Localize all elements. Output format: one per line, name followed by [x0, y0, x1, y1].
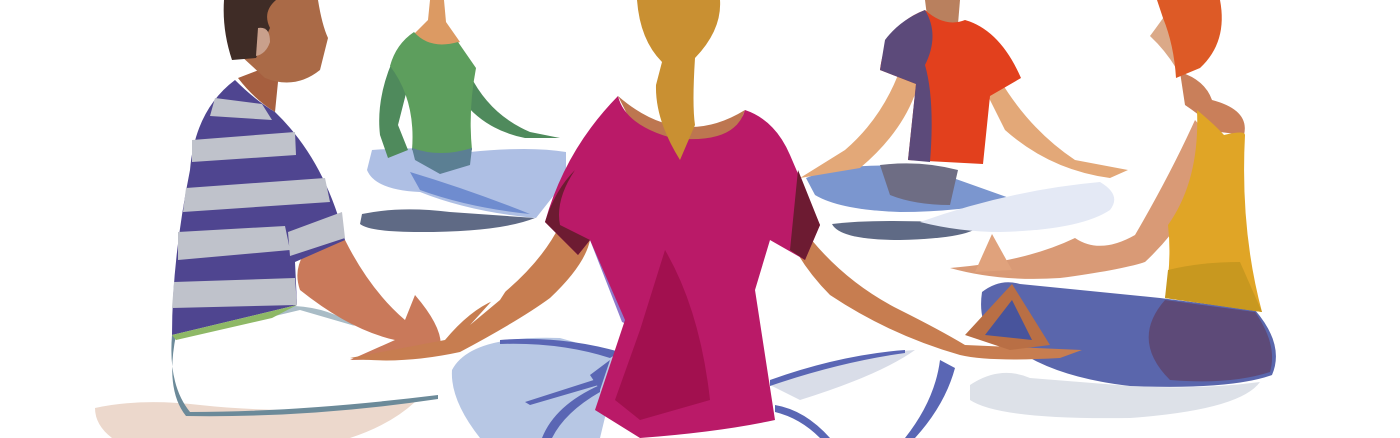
magenta shirt: [545, 96, 820, 438]
legs: [806, 166, 1015, 212]
arms: [800, 75, 918, 178]
yellow top: [1165, 110, 1262, 312]
hands and arm: [950, 120, 1222, 279]
head: [240, 0, 328, 82]
neck: [238, 62, 280, 112]
figure: central woman in magenta shirt seen from behind: [350, 0, 1082, 438]
arms: [379, 62, 412, 158]
floor shadow: [970, 373, 1260, 418]
right arm: [790, 225, 1082, 359]
floor shadow: [95, 402, 415, 438]
neck and shoulder: [1180, 72, 1245, 135]
ear: [256, 28, 270, 56]
hem: [172, 305, 297, 340]
striped shirt: [172, 80, 345, 335]
leg outline: [171, 335, 438, 416]
red shirt: [880, 10, 1021, 164]
figure: back left person in green top: [360, 0, 566, 232]
legs: [367, 148, 566, 218]
neck: [414, 0, 460, 50]
right hand: [965, 284, 1050, 350]
floor shadow: [360, 209, 535, 232]
green top: [390, 32, 476, 155]
red hair: [1157, 0, 1222, 78]
figure: right person in yellow top: [950, 0, 1276, 418]
lavender shade under sleeve: [590, 215, 640, 330]
jeans: [981, 282, 1276, 387]
arm: [297, 238, 441, 360]
blonde hair and ponytail: [637, 0, 720, 160]
face: [1150, 14, 1190, 72]
shirt stripes: [172, 98, 345, 308]
left arm: [350, 225, 590, 360]
shirt shadow: [880, 10, 932, 162]
crossed legs: [452, 338, 620, 438]
waist shading: [412, 148, 472, 174]
yellow top lower shading: [1165, 262, 1262, 312]
figure: left man in striped shirt: [95, 0, 441, 438]
figure: back right person in red shirt: [800, 0, 1128, 240]
shirt shadow: [615, 250, 710, 420]
sleeve shadows: [545, 170, 820, 260]
neck: [925, 0, 960, 24]
neck and back: [618, 96, 745, 150]
dark hair: [224, 0, 276, 60]
floor shadow: [832, 221, 980, 240]
